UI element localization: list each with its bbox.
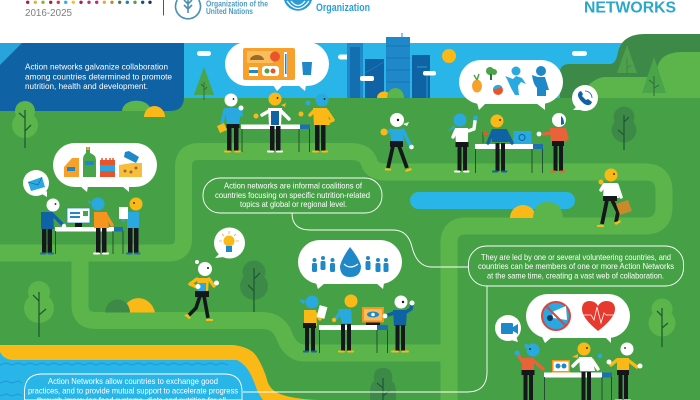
sun	[442, 49, 456, 63]
icon bubble: idea bulb	[214, 228, 245, 258]
intro text	[25, 62, 172, 91]
person	[299, 296, 327, 352]
FAO logo	[176, 0, 200, 19]
tree	[194, 67, 214, 100]
speech bubble: food products	[53, 143, 157, 192]
speech bubble: health	[526, 294, 630, 343]
person	[572, 342, 602, 400]
icon bubble: mail	[23, 170, 49, 197]
lake	[410, 192, 575, 209]
speech bubble: school meal	[225, 42, 329, 91]
tree	[648, 298, 676, 347]
walking paths	[0, 152, 664, 400]
callout: informal coalitions: Action networks are informal coalitions of	[224, 182, 363, 190]
icon: no sign	[542, 302, 570, 330]
team one: table	[241, 124, 310, 152]
hill tree right	[642, 57, 666, 96]
person	[217, 94, 244, 152]
person	[40, 198, 66, 254]
meadow	[0, 98, 700, 400]
WHO logo	[284, 0, 312, 11]
title: NETWORKS	[584, 0, 676, 16]
hill tree left	[617, 45, 637, 76]
icon: heart	[582, 301, 615, 331]
person	[383, 296, 414, 352]
callout: informal coalitions: countries focusing on specific nutrition-related	[215, 191, 370, 200]
dark hill	[560, 34, 700, 98]
walker with pineapple	[380, 113, 414, 172]
speech bubble: community and water	[298, 240, 402, 289]
beach and water	[0, 345, 317, 400]
callout: volunteering countries: at the same time, creating a vast web of collaboration.	[487, 271, 664, 280]
callout: volunteering countries	[468, 246, 684, 286]
sky	[150, 43, 640, 103]
person	[254, 92, 289, 152]
callout: exchange good practices: Action Networks allow countries to exchange good	[48, 377, 218, 386]
person	[87, 198, 112, 254]
clouds	[197, 51, 587, 60]
team four: table and monitor	[319, 307, 388, 353]
light hill	[556, 52, 700, 98]
header bar	[0, 0, 700, 43]
speech bubble: nutrition and activity	[459, 60, 563, 110]
callout connectors	[243, 213, 487, 392]
city skyline	[347, 33, 436, 98]
icon bubble: phone	[572, 85, 598, 111]
person	[119, 198, 142, 254]
person	[488, 114, 512, 172]
team five: table and laptop	[544, 360, 612, 400]
intro text: Action networks galvanize collaboration	[25, 62, 168, 72]
tree	[370, 368, 396, 400]
WHO name: Organization	[316, 2, 370, 14]
mound left	[105, 298, 155, 312]
callout: informal coalitions	[203, 178, 382, 213]
walker with idea	[184, 260, 219, 321]
decade dots	[26, 1, 152, 4]
intro text: nutrition, health and development.	[25, 82, 148, 91]
tree	[240, 260, 268, 312]
team three: table and laptop	[475, 131, 543, 173]
intro text: among countries determined to promote	[25, 72, 172, 82]
decade years: 2016-2025	[25, 8, 72, 19]
tree	[612, 106, 636, 150]
walker with briefcase	[597, 168, 632, 227]
callout: volunteering countries: They are led by one or several volunteering countries, and	[481, 253, 671, 262]
FAO name: United Nations	[206, 6, 253, 16]
callout: exchange good practices: practices, and to provide mutual support to accelerate progress	[28, 387, 238, 396]
person	[448, 114, 478, 172]
person	[298, 94, 333, 152]
tree	[12, 101, 38, 148]
person	[332, 294, 358, 352]
tree	[24, 281, 54, 337]
intro panel	[0, 43, 184, 117]
team two: table and monitor	[55, 208, 123, 254]
FAO name	[206, 0, 268, 16]
person	[514, 344, 543, 400]
icon bubble: video	[495, 315, 521, 342]
mound and sun by lake	[510, 202, 563, 218]
callout: exchange good practices	[24, 374, 242, 400]
callout: volunteering countries: countries can be members of one or more Action Networks	[478, 262, 674, 271]
person	[537, 113, 567, 172]
callout: informal coalitions: topics at global or regional level.	[240, 200, 347, 209]
person	[606, 342, 642, 400]
